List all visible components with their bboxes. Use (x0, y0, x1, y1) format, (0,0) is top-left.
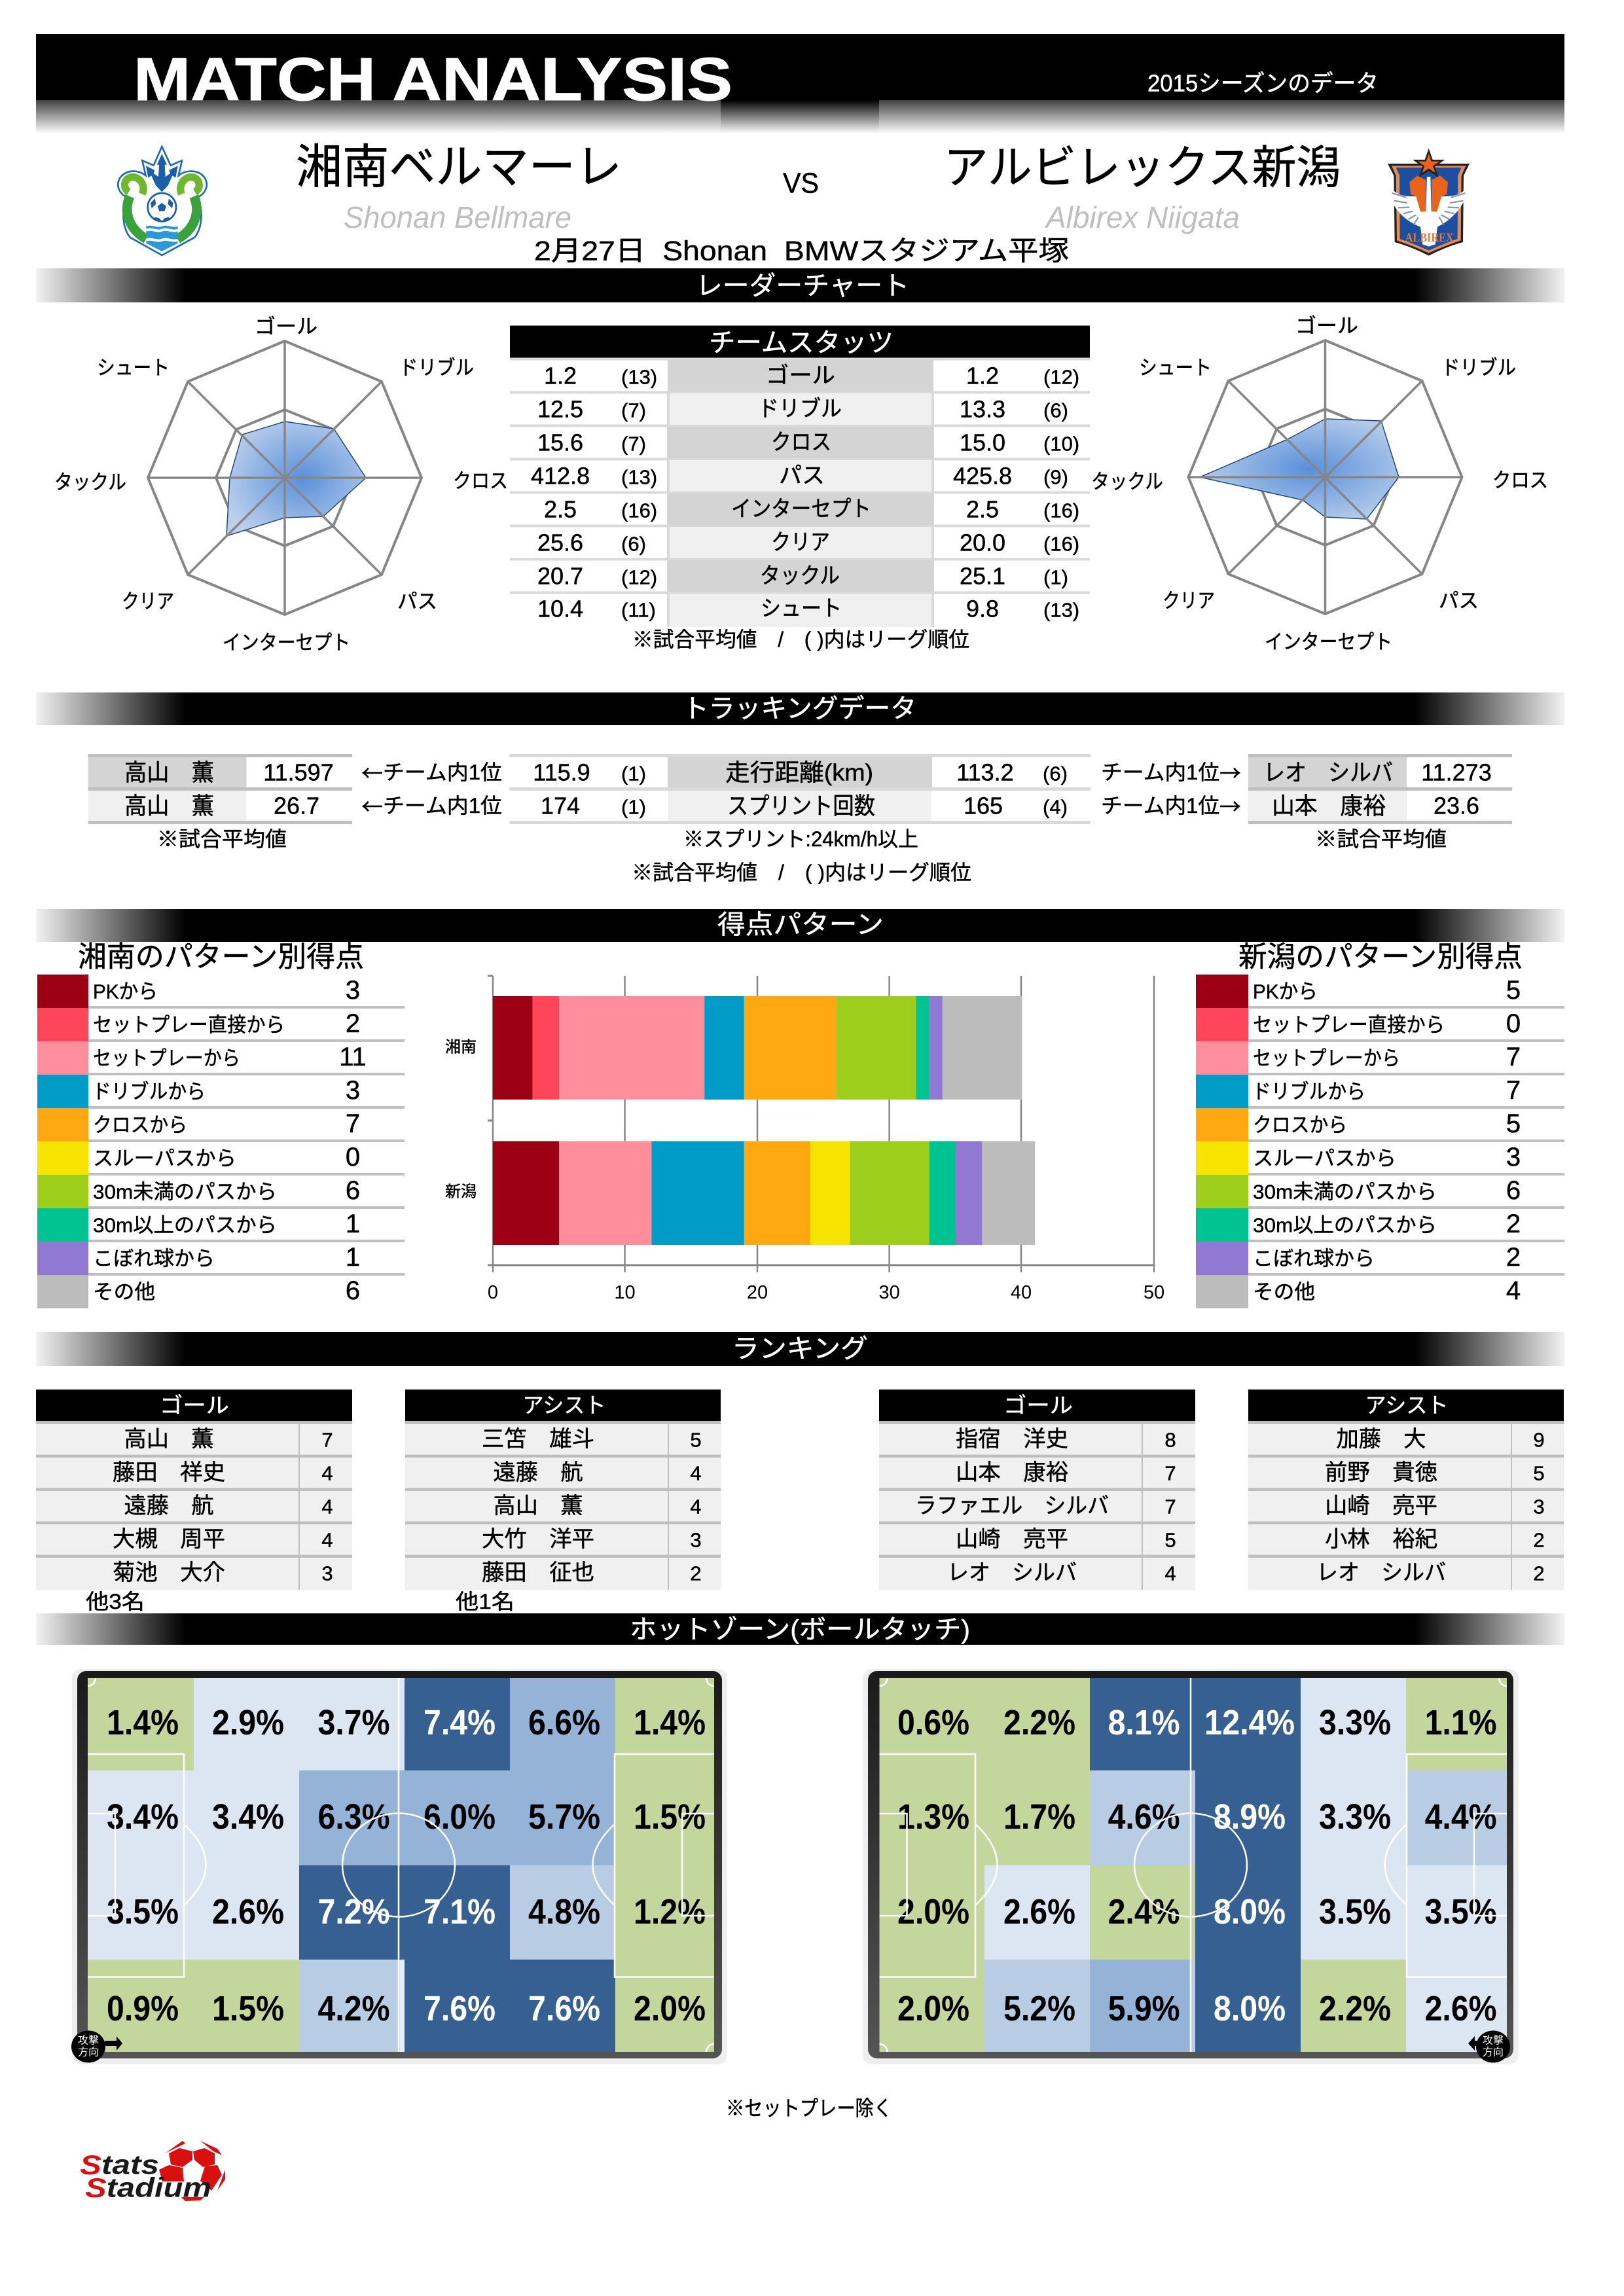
bar chart: scoring patterns: 40 (1011, 1282, 1032, 1303)
stats row: goal: 1.2 (966, 363, 999, 389)
panel: tracking data (88, 754, 1512, 884)
heatmap: Niigata hot zones: 5.9% (1108, 1989, 1180, 2028)
legend: Niigata scoring patterns: 30m以上のパスから (1253, 1213, 1437, 1237)
heatmap: Shonan hot zones: 1.5% (634, 1797, 706, 1837)
tracking: Shonan top players: 高山 薫 (124, 759, 214, 785)
legend: Niigata scoring patterns: 0 (1506, 1009, 1521, 1038)
stats row: goal: ゴール (766, 363, 835, 388)
heatmap: Niigata hot zones: 1.7% (1003, 1797, 1075, 1837)
radar chart: Shonan: クロス (453, 470, 508, 492)
table: Niigata assists: アシスト (1365, 1393, 1448, 1418)
tracking: Shonan top players: 高山 薫 (124, 792, 214, 819)
table: Niigata goals: 山崎 亮平 (956, 1527, 1068, 1552)
stats footnote: ※試合平均値 / ( )内はリーグ順位 (632, 628, 969, 651)
heatmap: Niigata hot zones: 2.2% (1319, 1989, 1391, 2028)
table: Niigata assists: 2 (1533, 1562, 1545, 1585)
stats row: clear: (16) (1043, 533, 1079, 555)
tracking: left arrows (361, 757, 502, 821)
radar chart: Niigata: クリア (1163, 589, 1215, 613)
table: Niigata goals: ゴール (1003, 1393, 1073, 1418)
heatmap: Shonan hot zones: 2.0% (634, 1989, 706, 2028)
heatmap: Shonan hot zones: 3.4% (107, 1797, 179, 1837)
stats row: shoot: 9.8 (966, 596, 999, 622)
tracking: right arrows (1101, 757, 1241, 821)
others note: assists: 他1名 (456, 1590, 514, 1613)
icon: Albirex Niigata crest: ALBIREX (1405, 231, 1454, 245)
data polygon (1200, 419, 1399, 519)
stats row: interception (544, 496, 1079, 522)
tracking: team table: (1) (621, 796, 646, 818)
icon: red soccer ball (159, 2141, 225, 2201)
radar chart: Shonan: クリア (122, 590, 174, 613)
stats row: pass: 412.8 (531, 462, 590, 490)
table: Shonan assists: 3 (690, 1529, 702, 1551)
heatmap: Shonan hot zones (71, 1669, 727, 2064)
legend: Shonan scoring patterns: PKから (93, 980, 158, 1003)
legend: Shonan scoring patterns: こぼれ球から (93, 1247, 215, 1270)
radar chart: Niigata: クロス (1492, 469, 1548, 492)
legend: Shonan scoring patterns: スルーパスから (93, 1147, 236, 1170)
section bar: scoring patterns: 得点パターン (717, 910, 884, 939)
table: Niigata goals: 5 (1164, 1529, 1176, 1551)
table: Niigata assists: 5 (1533, 1462, 1545, 1484)
legend: Niigata scoring patterns (1196, 941, 1564, 1308)
tracking: Niigata top players: 11.273 (1421, 759, 1492, 785)
bar chart: scoring patterns: 10 (614, 1282, 636, 1303)
tracking footnotes: ※スプリント:24km/h以上 (683, 827, 918, 851)
stats row: shoot: (13) (1043, 598, 1079, 622)
bar chart: scoring patterns: 20 (747, 1282, 768, 1303)
heatmap: Niigata hot zones: 2.4% (1108, 1892, 1180, 1931)
wordmark: Stadium: Stadium (85, 2172, 211, 2203)
table: Niigata goals: 8 (1164, 1428, 1176, 1452)
home team name: 湘南ベルマーレ (296, 141, 622, 194)
table: Shonan goals (36, 1390, 352, 1590)
heatmap: Shonan hot zones: 7.2% (318, 1892, 390, 1931)
icon: Shonan Bellmare crest (118, 147, 207, 255)
stats row: cross (537, 429, 1079, 456)
stats row: cross: 15.6 (537, 429, 583, 456)
legend: Shonan scoring patterns: 1 (346, 1210, 360, 1238)
stats row: shoot (537, 596, 1079, 622)
heatmap: Shonan hot zones: 6.6% (528, 1703, 600, 1742)
away team name: アルビレックス新潟 (944, 142, 1341, 193)
table: Shonan goals: 4 (321, 1529, 333, 1551)
heatmap: Niigata hot zones: 2.6% (1003, 1892, 1075, 1931)
table: Niigata goals: レオ シルバ (947, 1560, 1077, 1585)
table: Niigata goals: ラファエル シルバ (915, 1494, 1109, 1518)
tracking: team table: (6) (1043, 762, 1068, 785)
panel: team stats table: チームスタッツ (709, 329, 893, 357)
radar chart: Shonan: インターセプト (223, 631, 350, 655)
legend: Niigata scoring patterns: クロスから (1253, 1114, 1347, 1136)
radar chart: Shonan (54, 315, 508, 655)
table: Shonan goals: 7 (321, 1428, 333, 1452)
heatmap: Shonan hot zones: 2.6% (212, 1892, 284, 1931)
heatmap: Niigata hot zones: 1.3% (897, 1797, 969, 1837)
date and stadium: 2月27日 Shonan BMWスタジアム平塚 (534, 236, 1069, 266)
attack direction badge: 方向 (78, 2046, 99, 2058)
table: Niigata assists (1248, 1390, 1564, 1590)
stats row: clear: クリア (771, 530, 830, 555)
heatmap: Shonan hot zones: 6.3% (318, 1797, 390, 1837)
heatmap: Shonan hot zones: 0.9% (107, 1989, 179, 2028)
heatmap: Shonan hot zones: 4.8% (528, 1892, 600, 1931)
legend: Niigata scoring patterns: 5 (1506, 1109, 1521, 1138)
tracking: right arrows: チーム内1位→ (1101, 791, 1241, 821)
heatmap: Shonan hot zones: 7.6% (528, 1989, 600, 2028)
stats row: clear (537, 529, 1079, 556)
stats row: shoot: シュート (761, 596, 842, 621)
legend: Shonan scoring patterns: 6 (346, 1176, 360, 1205)
heatmap: Niigata hot zones: 12.4% (1204, 1703, 1295, 1742)
heatmap: Niigata hot zones: 2.2% (1003, 1703, 1075, 1742)
section bar: ranking (36, 1332, 1564, 1366)
heatmap: Shonan hot zones: 3.5% (107, 1892, 179, 1931)
table: Shonan assists: 高山 薫 (494, 1494, 583, 1518)
panel: team stats table (510, 326, 1090, 651)
radar chart: Niigata: ドリブル (1441, 356, 1516, 380)
table: Niigata goals: 山本 康裕 (956, 1460, 1068, 1485)
stats row: pass: (9) (1043, 466, 1068, 488)
table: Shonan goals: 藤田 祥史 (113, 1460, 225, 1485)
stats row: pass (531, 462, 1068, 490)
stats row: dribble: 13.3 (960, 395, 1005, 423)
tracking footnotes: ※試合平均値 / ( )内はリーグ順位 (632, 861, 971, 884)
logo: Stats Stadium (80, 2141, 225, 2203)
legend: Niigata scoring patterns: 7 (1506, 1076, 1521, 1105)
section bar: tracking data (36, 692, 1564, 725)
heatmap: Niigata hot zones: 3.5% (1319, 1892, 1391, 1931)
attack direction badge: 攻撃 (1483, 2034, 1504, 2046)
stats row: cross: (10) (1043, 432, 1079, 456)
stats row: shoot: (11) (621, 598, 656, 622)
table: Niigata assists: 9 (1533, 1428, 1545, 1452)
tracking: Shonan top players (88, 754, 352, 824)
table: Niigata goals: 7 (1164, 1462, 1176, 1484)
heatmap: Niigata hot zones: 8.0% (1214, 1989, 1286, 2028)
stats row: interception: 2.5 (544, 496, 577, 522)
tracking: Shonan top players: 11.597 (263, 759, 334, 785)
stats row: interception: インターセプト (731, 497, 871, 522)
legend: Shonan scoring patterns: 11 (339, 1043, 367, 1071)
stats row: goal (544, 363, 1079, 389)
stats row: tackle: 25.1 (960, 563, 1005, 589)
legend: Niigata scoring patterns: PKから (1253, 980, 1318, 1003)
stats row: interception: (16) (1043, 499, 1079, 522)
table: Shonan assists: 2 (690, 1562, 702, 1585)
header band (36, 34, 1564, 133)
section bar: hot zone (36, 1613, 1564, 1645)
tracking: right arrows: チーム内1位→ (1101, 757, 1241, 787)
stats row: pass: (13) (621, 466, 657, 488)
table: Shonan assists: アシスト (522, 1393, 606, 1418)
icon: Albirex Niigata crest (1388, 149, 1470, 256)
legend: Niigata scoring patterns: 2 (1506, 1210, 1521, 1238)
bar chart: scoring patterns: 0 (488, 1282, 498, 1303)
heatmap: Shonan hot zones: 3.4% (212, 1797, 284, 1837)
table: Shonan assists: 4 (690, 1495, 702, 1518)
tracking footnotes: ※試合平均値 (157, 827, 287, 851)
bar chart: scoring patterns: 新潟 (445, 1183, 477, 1200)
heatmap: Niigata hot zones: 1.1% (1425, 1703, 1497, 1742)
wordmark: Stats: Stats (80, 2149, 159, 2179)
section bar: radar chart (36, 268, 1564, 302)
tracking: team table: 165 (964, 792, 1003, 819)
table: Shonan assists: 遠藤 航 (494, 1460, 583, 1485)
stats row: interception: (16) (621, 499, 657, 522)
section bar: scoring patterns (36, 909, 1564, 942)
heatmap: Shonan hot zones: 1.4% (634, 1703, 706, 1742)
legend: Shonan scoring patterns (37, 941, 405, 1308)
legend: Niigata scoring patterns: 7 (1506, 1043, 1521, 1071)
bar chart: scoring patterns: 50 (1144, 1282, 1164, 1303)
table: Niigata goals: 7 (1164, 1495, 1176, 1518)
attack direction badge (1468, 2030, 1510, 2063)
stats row: cross: 15.0 (960, 429, 1005, 456)
heatmap: Shonan hot zones: 7.1% (424, 1892, 496, 1931)
tracking: team table: (1) (621, 762, 646, 785)
legend: Niigata scoring patterns: 30m未満のパスから (1253, 1181, 1437, 1203)
legend: Shonan scoring patterns: セットプレー直接から (93, 1013, 285, 1037)
table: Shonan assists: 藤田 征也 (482, 1560, 594, 1585)
radar chart: Shonan: ドリブル (399, 356, 474, 380)
radar chart: Shonan: シュート (97, 356, 170, 380)
heatmap: Shonan hot zones: 1.2% (634, 1892, 706, 1931)
heatmap: Niigata hot zones: 4.6% (1108, 1797, 1180, 1837)
section bar: ranking: ランキング (732, 1335, 868, 1363)
section bar: tracking data: トラッキングデータ (683, 694, 916, 723)
heatmap: Shonan hot zones: 1.4% (107, 1703, 179, 1742)
attack direction badge (71, 2030, 122, 2063)
tracking: Shonan top players: 26.7 (274, 792, 319, 819)
legend: Niigata scoring patterns: ドリブルから (1252, 1080, 1365, 1103)
legend: Shonan scoring patterns: クロスから (93, 1114, 187, 1136)
tracking: team table: 走行距離(km) (725, 759, 873, 785)
heatmap: Niigata hot zones: 3.5% (1425, 1892, 1497, 1931)
attack direction badge: 方向 (1483, 2046, 1504, 2058)
bar chart: scoring patterns: 湘南 (445, 1038, 477, 1056)
table: Shonan goals: 菊池 大介 (113, 1560, 225, 1585)
data polygon (226, 422, 366, 536)
heatmap: Niigata hot zones: 0.6% (897, 1703, 969, 1742)
tracking footnotes (157, 827, 1447, 884)
section bar: radar chart: レーダーチャート (696, 272, 909, 300)
heatmap: Niigata hot zones: 2.6% (1425, 1989, 1497, 2028)
stats row: dribble: (6) (1043, 399, 1068, 422)
table: Shonan goals: 4 (321, 1495, 333, 1518)
stats row: clear: (6) (621, 533, 646, 555)
legend: Niigata scoring patterns: 2 (1506, 1243, 1521, 1272)
heatmap: Shonan hot zones: 5.7% (528, 1797, 600, 1837)
radar chart: Niigata: ゴール (1295, 314, 1358, 338)
stats row: tackle: (1) (1043, 565, 1068, 589)
away team latin name: Albirex Niigata (1044, 200, 1240, 234)
table: Niigata assists: 小林 裕紀 (1325, 1527, 1437, 1552)
stats row: pass: 425.8 (953, 462, 1012, 490)
bar chart: scoring patterns (445, 976, 1164, 1303)
radar chart: Shonan: ゴール (255, 315, 317, 338)
stats row: goal: (12) (1043, 365, 1079, 389)
tracking: team table (509, 754, 1091, 824)
legend: Niigata scoring patterns: こぼれ球から (1253, 1247, 1375, 1270)
stats row: dribble: 12.5 (537, 395, 583, 423)
legend: Shonan scoring patterns: 7 (346, 1109, 360, 1138)
versus: VS (783, 168, 819, 199)
table: Niigata assists: 2 (1533, 1529, 1545, 1551)
legend: Shonan scoring patterns: 30m以上のパスから (93, 1213, 277, 1237)
legend: Shonan scoring patterns: ドリブルから (92, 1080, 206, 1103)
stats row: interception: 2.5 (966, 496, 999, 522)
stats row: tackle (537, 563, 1068, 589)
radar chart: Niigata: インターセプト (1265, 631, 1392, 653)
others note: goals: 他3名 (86, 1590, 145, 1613)
legend: Shonan scoring patterns: セットプレーから (93, 1047, 240, 1069)
legend: Shonan scoring patterns: 0 (346, 1143, 360, 1172)
stats row: goal: 1.2 (544, 363, 577, 389)
table: Shonan assists: 4 (690, 1462, 702, 1484)
bar: Shonan (493, 996, 1022, 1100)
heatmap: Shonan hot zones: 7.4% (424, 1703, 496, 1742)
table: Niigata goals: 指宿 洋史 (956, 1427, 1068, 1452)
season label: 2015シーズンのデータ (1147, 69, 1379, 97)
legend: Shonan scoring patterns: 1 (346, 1243, 360, 1272)
radar chart: Shonan: タックル (54, 471, 126, 493)
legend: Niigata scoring patterns: 5 (1506, 976, 1521, 1005)
legend: Niigata scoring patterns: 3 (1506, 1143, 1521, 1172)
heatmap: Niigata hot zones: 3.3% (1319, 1703, 1391, 1742)
table: Shonan goals: ゴール (160, 1393, 229, 1418)
legend: Niigata scoring patterns: その他 (1253, 1280, 1315, 1304)
legend: Shonan scoring patterns: 30m未満のパスから (93, 1181, 277, 1203)
stats row: pass: パス (779, 463, 825, 488)
tracking: team table: 113.2 (956, 759, 1014, 785)
heatmap: Niigata hot zones: 8.1% (1108, 1703, 1180, 1742)
heatmap: Shonan hot zones: 1.5% (212, 1989, 284, 2028)
heatmap: Niigata hot zones: 8.0% (1214, 1892, 1286, 1931)
section bar: hot zone: ホットゾーン(ボールタッチ) (630, 1615, 970, 1644)
stats row: dribble (537, 395, 1068, 423)
radar chart: Niigata: パス (1439, 589, 1479, 613)
heatmap: Shonan hot zones: 2.9% (212, 1703, 284, 1742)
stats row: tackle: 20.7 (537, 563, 583, 589)
radar chart: Shonan: パス (397, 590, 437, 613)
heatmap: Niigata hot zones: 3.3% (1319, 1797, 1391, 1837)
radar chart: Niigata: タックル (1091, 470, 1163, 493)
bar: Niigata (493, 1141, 1035, 1245)
tracking: Niigata top players (1248, 754, 1512, 824)
table: Niigata assists: 山崎 亮平 (1325, 1494, 1437, 1518)
legend: Niigata scoring patterns: 4 (1506, 1276, 1521, 1305)
radar chart: Niigata: シュート (1139, 356, 1212, 380)
legend: Shonan scoring patterns: 3 (346, 976, 360, 1005)
title: MATCH ANALYSIS (134, 45, 732, 113)
legend: Niigata scoring patterns: セットプレー直接から (1253, 1013, 1445, 1037)
table: Shonan goals: 遠藤 航 (124, 1494, 213, 1518)
tracking footnotes: ※試合平均値 (1315, 827, 1447, 851)
table: Niigata goals: 4 (1164, 1562, 1176, 1585)
legend: Shonan scoring patterns: 3 (346, 1076, 360, 1105)
legend: Shonan scoring patterns: 湘南のパターン別得点 (78, 941, 364, 973)
table: Shonan assists: 三笘 雄斗 (482, 1427, 594, 1452)
heatmap: Shonan hot zones: 3.7% (318, 1703, 390, 1742)
table: Niigata assists: 加藤 大 (1337, 1427, 1426, 1452)
stats row: cross: クロス (771, 430, 831, 455)
stats row: goal: (13) (621, 365, 657, 389)
legend: Niigata scoring patterns: 6 (1506, 1176, 1521, 1205)
match title block (296, 141, 1341, 266)
heatmap: Niigata hot zones: 5.2% (1003, 1989, 1075, 2028)
table: Niigata assists: 3 (1533, 1495, 1545, 1518)
table: Shonan assists (405, 1390, 721, 1590)
table: Shonan assists: 大竹 洋平 (482, 1527, 594, 1552)
table: Niigata goals (879, 1390, 1195, 1590)
table: Shonan goals: 高山 薫 (124, 1427, 213, 1452)
legend: Shonan scoring patterns: 6 (346, 1276, 360, 1305)
heatmap: Shonan hot zones: 4.2% (318, 1989, 390, 2028)
table: Shonan assists: 5 (690, 1428, 702, 1452)
heatmap: Shonan hot zones: 7.6% (424, 1989, 496, 2028)
heatmap: Niigata hot zones: 8.9% (1214, 1797, 1286, 1837)
tracking: Niigata top players: レオ シルバ (1263, 759, 1393, 785)
tracking: Niigata top players: 山本 康裕 (1272, 792, 1386, 819)
table: Niigata assists: レオ シルバ (1316, 1560, 1446, 1585)
heatmap: Niigata hot zones: 4.4% (1425, 1797, 1497, 1837)
table: Shonan goals: 3 (321, 1562, 333, 1585)
legend: Shonan scoring patterns: 2 (346, 1009, 360, 1038)
heatmap: Niigata hot zones (863, 1669, 1519, 2064)
legend: Shonan scoring patterns: その他 (93, 1280, 155, 1304)
stats row: tackle: (12) (621, 565, 657, 589)
tracking: team table: スプリント回数 (727, 792, 875, 819)
stats row: tackle: タックル (760, 564, 840, 588)
table: Niigata assists: 前野 貴徳 (1325, 1460, 1437, 1485)
tracking: team table: (4) (1043, 796, 1068, 818)
heatmap: Niigata hot zones: 2.0% (897, 1892, 969, 1931)
stats row: shoot: 10.4 (537, 596, 583, 622)
heatmap: Shonan hot zones: 6.0% (424, 1797, 496, 1837)
home team latin name: Shonan Bellmare (344, 200, 571, 234)
tracking: team table: 115.9 (533, 759, 590, 785)
bar chart: scoring patterns: 30 (878, 1282, 900, 1303)
stats row: dribble: ドリブル (758, 397, 842, 422)
stats row: clear: 20.0 (960, 529, 1005, 556)
table: Shonan goals: 4 (321, 1462, 333, 1484)
legend: Niigata scoring patterns: セットプレーから (1253, 1047, 1400, 1069)
table: Shonan goals: 大槻 周平 (113, 1527, 225, 1552)
tracking: left arrows: ←チーム内1位 (361, 757, 502, 787)
footnote: set plays excluded: ※セットプレー除く (726, 2096, 892, 2120)
heatmap: Niigata hot zones: 2.0% (897, 1989, 969, 2028)
legend: Niigata scoring patterns: 新潟のパターン別得点 (1238, 941, 1523, 973)
legend: Niigata scoring patterns: スルーパスから (1253, 1147, 1396, 1170)
stats row: clear: 25.6 (537, 529, 583, 556)
tracking: Niigata top players: 23.6 (1434, 792, 1479, 819)
attack direction badge: 攻撃 (78, 2034, 99, 2046)
stats row: cross: (7) (621, 432, 646, 456)
radar chart: Niigata (1091, 314, 1548, 653)
stats row: dribble: (7) (621, 399, 646, 422)
tracking: left arrows: ←チーム内1位 (361, 791, 502, 821)
tracking: team table: 174 (541, 792, 580, 819)
